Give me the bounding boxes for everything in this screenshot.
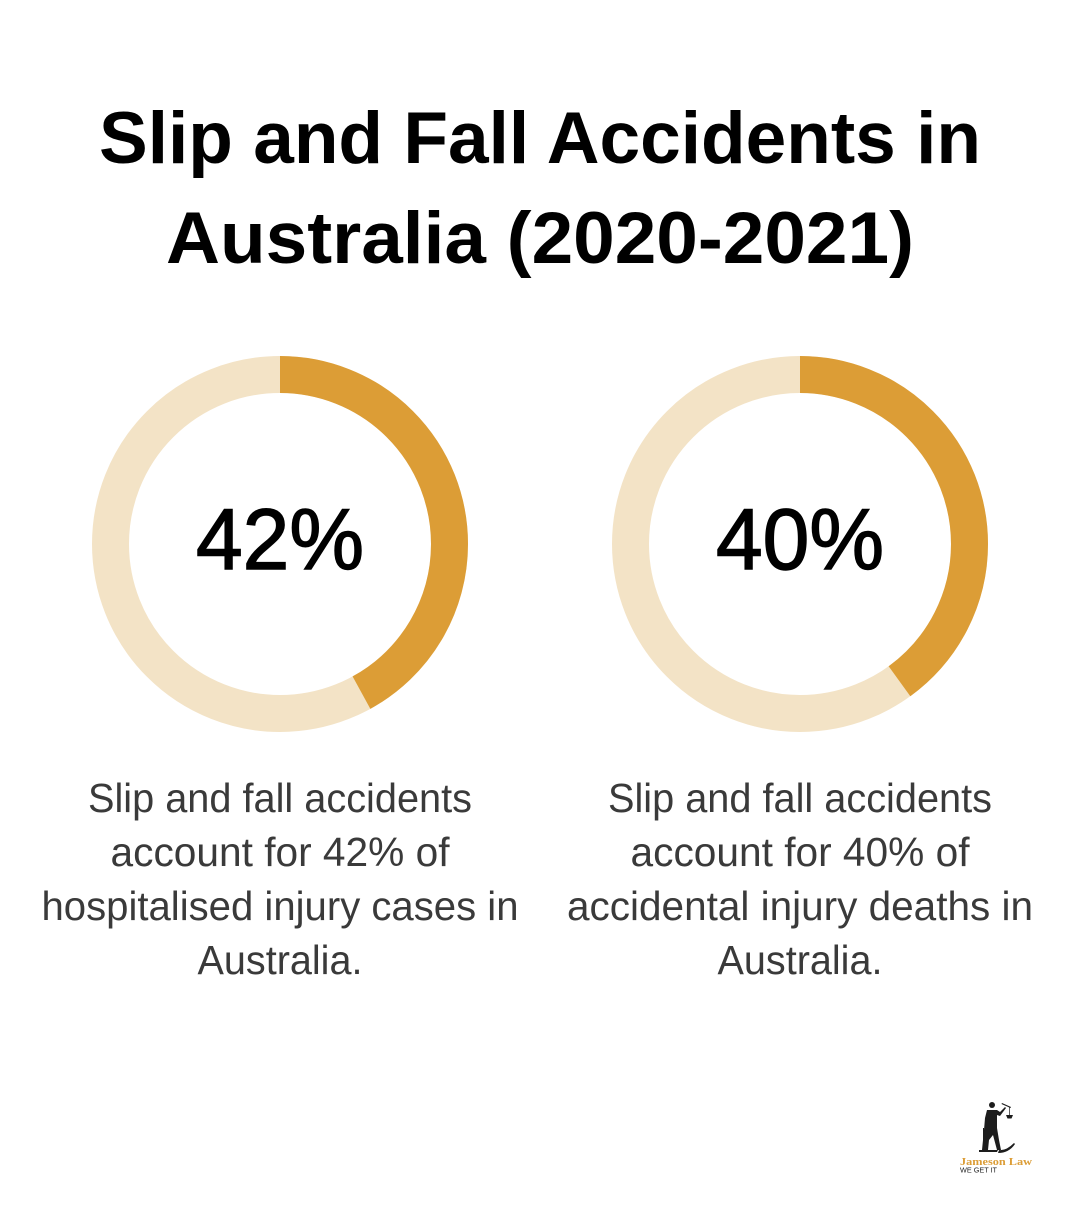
description: 40%: accidental injury deaths in — [567, 883, 1033, 929]
description: 42%: hospitalised injury cases in — [42, 883, 518, 929]
description: 40% — [567, 775, 1033, 983]
description: 40%: Australia. — [718, 937, 882, 983]
value: 40%: 40% — [716, 492, 884, 588]
icon: lady justice — [979, 1102, 1015, 1153]
description: 42%: Australia. — [198, 937, 362, 983]
title: Slip and Fall Accidents in — [99, 98, 981, 179]
title — [99, 98, 981, 279]
description: 40%: Slip and fall accidents — [608, 775, 992, 821]
value: 42%: 42% — [196, 492, 364, 588]
donut chart: 40% — [630, 374, 970, 714]
wordmark: Jameson Law — [960, 1156, 1032, 1168]
description: 40%: account for 40% of — [630, 829, 970, 875]
description: 42% — [42, 775, 518, 983]
panel: 42% hospitalised injury cases — [42, 374, 518, 983]
tagline: WE GET IT — [960, 1168, 998, 1174]
description: 42%: Slip and fall accidents — [88, 775, 472, 821]
donut chart: 42% — [110, 374, 450, 714]
logo: Jameson Law — [960, 1102, 1032, 1174]
title: Australia (2020-2021) — [166, 198, 914, 279]
panel: 40% accidental injury deaths — [567, 374, 1033, 983]
description: 42%: account for 42% of — [110, 829, 450, 875]
